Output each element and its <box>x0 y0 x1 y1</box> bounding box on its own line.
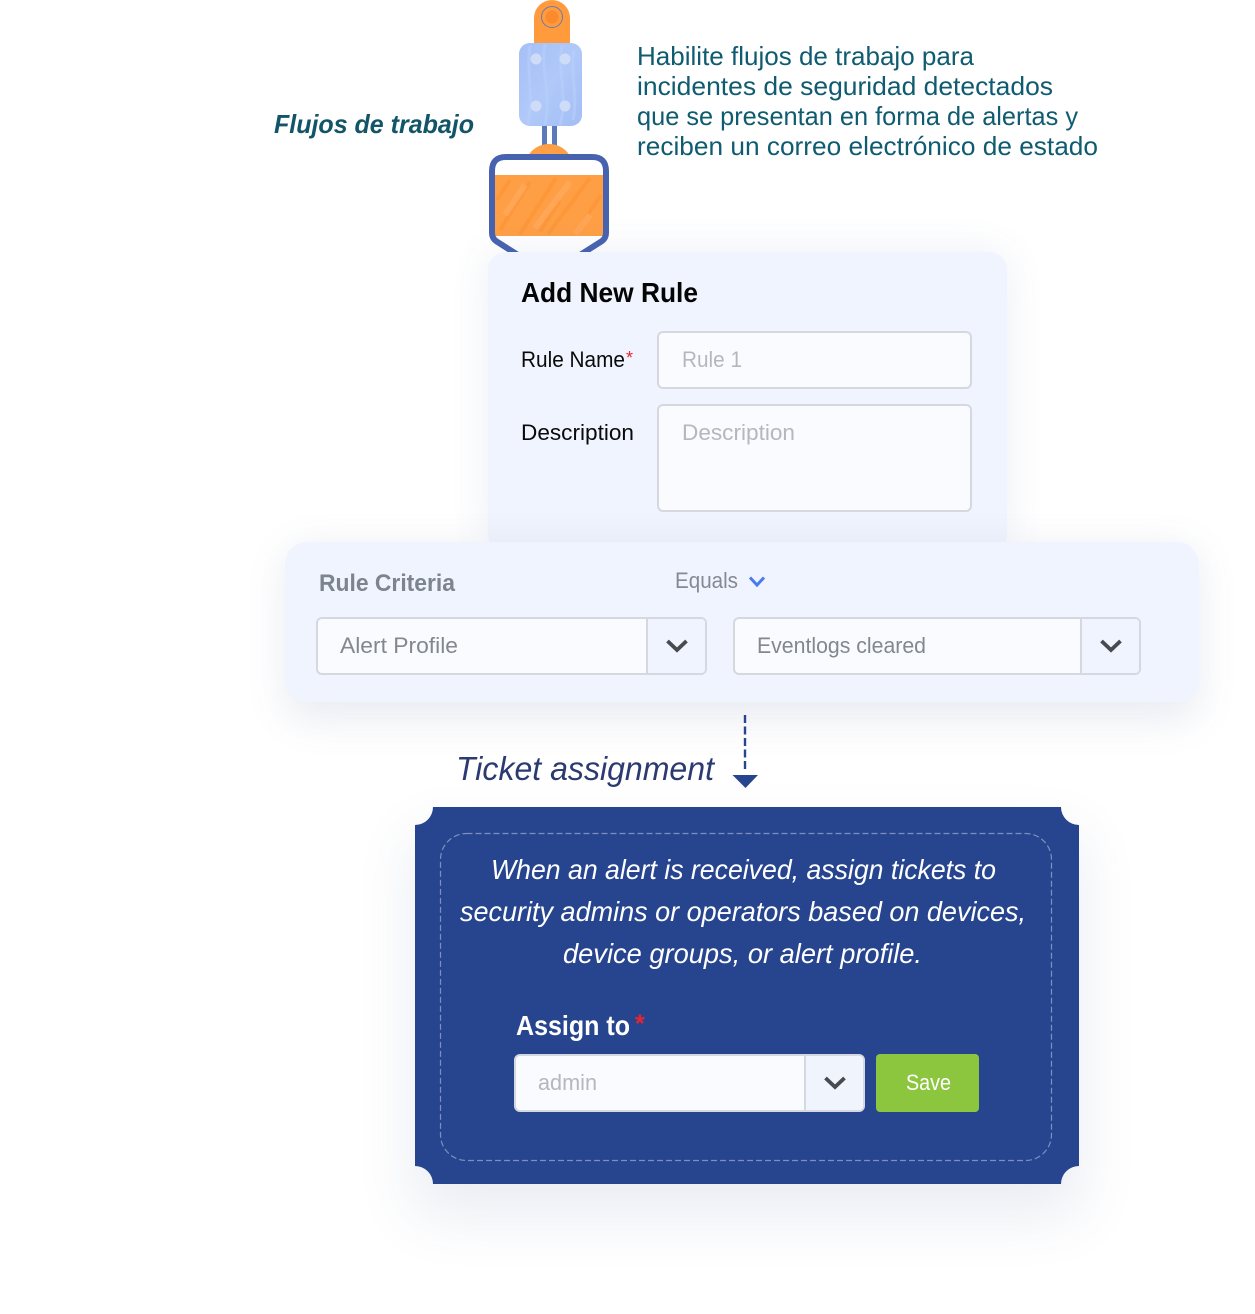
text block: ticket description: device groups, or alert profile. <box>563 938 922 969</box>
text block: workflow description: Habilite flujos de trabajo para <box>637 41 975 71</box>
label: flujos de trabajo: Flujos de trabajo <box>274 109 474 139</box>
text block: workflow description: que se presentan en forma de alertas y <box>637 101 1078 131</box>
heading: add new rule: Add New Rule <box>521 277 698 308</box>
button: save <box>876 1054 979 1112</box>
heading: rule criteria: Rule Criteria <box>319 570 456 597</box>
select: admin: admin <box>538 1070 597 1095</box>
text block: workflow description <box>637 41 1098 161</box>
arrow: dashed down arrow <box>732 715 758 788</box>
select: eventlogs cleared: Eventlogs cleared <box>757 633 926 658</box>
input: rule name <box>658 332 971 388</box>
label: assign to: * <box>635 1010 645 1038</box>
panel: add new rule <box>488 252 1007 552</box>
dropdown: equals: Equals <box>675 568 738 593</box>
input: description <box>658 405 971 511</box>
select: admin <box>515 1055 864 1111</box>
text block: ticket description: security admins or operators based on devices, <box>460 896 1026 927</box>
text block: ticket description <box>460 854 1026 969</box>
label: assign to: Assign to <box>516 1010 630 1041</box>
label: ticket assignment: Ticket assignment <box>456 750 716 787</box>
text block: workflow description: incidentes de seguridad detectados <box>637 71 1053 101</box>
panel: rule criteria <box>285 542 1199 702</box>
icon: robotic arm <box>492 0 606 255</box>
ticket shadow <box>415 837 1079 1214</box>
label: rule name: Rule Name <box>521 347 625 372</box>
select: alert profile: Alert Profile <box>340 633 458 658</box>
button: save: Save <box>906 1070 951 1095</box>
label: rule name: * <box>626 348 633 368</box>
panel: ticket <box>415 807 1079 1184</box>
label: description: Description <box>521 420 634 445</box>
text block: ticket description: When an alert is received, assign tickets to <box>491 854 996 885</box>
text block: workflow description: reciben un correo electrónico de estado <box>637 131 1098 161</box>
select: eventlogs cleared <box>734 618 1140 674</box>
input: description: Description <box>682 420 795 445</box>
card shadow: add new rule <box>488 252 1007 552</box>
input: rule name: Rule 1 <box>682 347 742 372</box>
card shadow: rule criteria <box>285 548 1199 720</box>
select: alert profile <box>317 618 706 674</box>
